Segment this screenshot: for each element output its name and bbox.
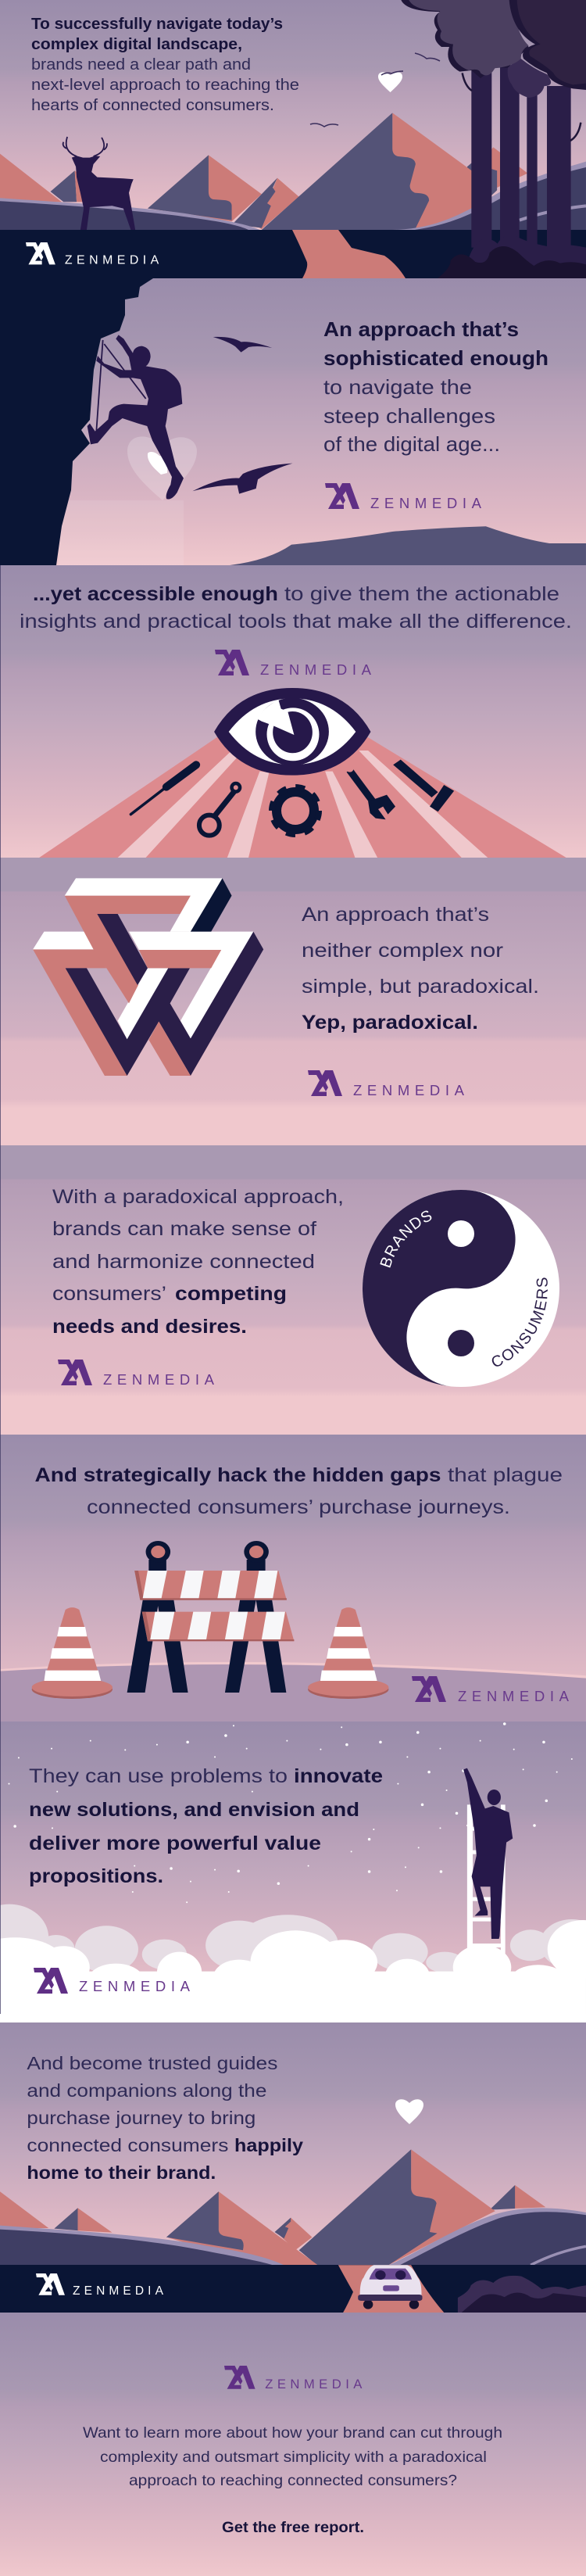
panel 1 sky background xyxy=(0,0,586,231)
panel 8 sky background xyxy=(0,2022,586,2266)
panel 8 text: connected consumers xyxy=(27,2135,228,2155)
ground band xyxy=(0,230,586,278)
panel 5 sky background xyxy=(0,1145,586,1435)
distant hill xyxy=(230,526,586,565)
ground band xyxy=(0,2265,586,2313)
panel 1 intro text: next-level approach to reaching the xyxy=(31,77,299,94)
panel 2 heading text: sophisticated enough xyxy=(323,346,548,370)
deer silhouette xyxy=(63,137,135,230)
call to action text: Want to learn more about how your brand can cut through xyxy=(83,2424,502,2442)
panel 7 text xyxy=(29,1765,383,1887)
back clouds xyxy=(0,1904,586,1973)
panel: eye and tools xyxy=(0,565,586,858)
panel left edge line xyxy=(0,565,1,2014)
logo: white Zen Media: ZENMEDIA xyxy=(73,2284,164,2298)
starfield xyxy=(9,1724,572,1902)
icon: hammer xyxy=(393,760,454,811)
panel 8 text: And become trusted guides xyxy=(27,2053,277,2073)
panel 9 sky background xyxy=(0,2313,586,2576)
yin yang symbol: CONSUMERS xyxy=(492,1277,548,1367)
birds in sky xyxy=(310,53,440,127)
panel 6 heading text: that plague xyxy=(448,1464,563,1486)
logo: Zen Media: ZENMEDIA xyxy=(79,1978,191,1994)
cliff silhouette xyxy=(0,278,153,565)
panel: climber on cliff xyxy=(0,278,586,565)
logo: Zen Media: ZENMEDIA xyxy=(260,661,372,678)
panel 1 intro text: hearts of connected consumers. xyxy=(31,97,274,114)
bottom board xyxy=(142,1612,294,1641)
panel 6 heading text: And strategically hack the hidden gaps xyxy=(34,1464,441,1486)
bushes xyxy=(458,2276,586,2313)
panel 8 text: and companions along the xyxy=(27,2080,266,2101)
call to action text xyxy=(83,2424,502,2536)
panel 8 text: purchase journey to bring xyxy=(27,2108,255,2128)
climber silhouette xyxy=(88,335,184,500)
panel 5 text: and harmonize connected xyxy=(52,1251,315,1273)
panel 7 text: new solutions, and envision and xyxy=(29,1799,359,1821)
panel 6 heading text xyxy=(34,1464,563,1518)
panel 2 heading text: An approach that’s xyxy=(323,317,519,341)
panel: yin yang xyxy=(0,1145,586,1435)
panel: clear path landscape xyxy=(0,0,586,278)
panel: call to action xyxy=(0,2313,586,2576)
panel 7 text: propositions. xyxy=(29,1865,163,1887)
logo: white Zen Media xyxy=(36,2273,164,2298)
person silhouette reaching up xyxy=(463,1768,513,1939)
panel 2 heading text: to navigate the xyxy=(323,375,472,399)
logo: Zen Media: ZENMEDIA xyxy=(370,495,482,511)
panel 3 heading text: insights and practical tools that make all the difference. xyxy=(20,611,572,632)
panel 7 text: innovate xyxy=(294,1765,383,1787)
tool icons xyxy=(130,760,454,836)
panel 1 intro text: complex digital landscape, xyxy=(31,36,242,53)
logo: Zen Media xyxy=(215,650,372,678)
panel: impossible triangle xyxy=(0,858,586,1145)
panel: road home xyxy=(0,2022,586,2313)
winding road xyxy=(292,230,406,278)
front clouds xyxy=(0,1920,586,2022)
panel 3 heading text: to give them the actionable xyxy=(284,583,559,605)
panel: roadblock xyxy=(0,1435,586,1722)
panel 8 text xyxy=(27,2053,303,2183)
traffic cone right xyxy=(308,1607,388,1699)
yin yang symbol xyxy=(363,1190,559,1387)
logo: Zen Media xyxy=(58,1360,215,1388)
barricade xyxy=(127,1541,294,1693)
logo: Zen Media xyxy=(308,1070,465,1098)
icon: gear xyxy=(272,787,319,834)
traffic cone left xyxy=(32,1607,113,1699)
panel: ladder in the clouds xyxy=(0,1722,586,2022)
icon: glowing heart xyxy=(127,436,197,500)
panel 4 text xyxy=(302,904,539,1034)
panel 1 intro text xyxy=(31,16,299,114)
yin yang symbol: BRANDS xyxy=(380,1210,431,1268)
panel 5 text: With a paradoxical approach, xyxy=(52,1186,344,1208)
panel 3 heading text xyxy=(20,583,572,632)
pale glow beneath climber xyxy=(59,500,184,565)
ladder xyxy=(467,1804,506,1954)
panel 2 heading text xyxy=(323,317,548,456)
icon: wrench xyxy=(346,765,395,819)
barricade lamps xyxy=(146,1541,269,1571)
panel 8 text: happily xyxy=(234,2135,303,2155)
logo: white Zen Media xyxy=(26,242,159,267)
panel 4 text: An approach that’s xyxy=(302,904,489,926)
panel 5 text: needs and desires. xyxy=(52,1316,247,1338)
panel 1 intro text: To successfully navigate today’s xyxy=(31,16,283,33)
icon: spanner xyxy=(199,783,240,836)
impossible triangle figure xyxy=(33,878,263,1076)
light rays xyxy=(39,737,566,858)
panel 3 heading text: ...yet accessible enough xyxy=(33,583,278,605)
logo: Zen Media: ZENMEDIA xyxy=(458,1688,570,1704)
panel 4 sky background xyxy=(0,858,586,1145)
logo: Zen Media: ZENMEDIA xyxy=(353,1082,465,1098)
panel 2 heading text: steep challenges xyxy=(323,404,495,428)
logo: Zen Media xyxy=(224,2366,363,2391)
panel 2 heading text: of the digital age... xyxy=(323,432,500,456)
panel 5 text: competing xyxy=(175,1283,287,1305)
panel 3 sky background xyxy=(0,565,586,858)
mountain range xyxy=(0,113,586,230)
call to action text: complexity and outsmart simplicity with a paradoxical xyxy=(100,2449,487,2466)
icon: white heart xyxy=(378,72,402,92)
panel 5 text: brands can make sense of xyxy=(52,1218,316,1240)
panel 6 heading text: connected consumers’ purchase journeys. xyxy=(87,1496,510,1518)
barricade legs xyxy=(127,1600,286,1693)
call to action text: Get the free report. xyxy=(222,2519,364,2536)
call to action text: approach to reaching connected consumers? xyxy=(129,2472,457,2489)
panel 1 intro text: brands need a clear path and xyxy=(31,56,251,73)
logo: Zen Media: ZENMEDIA xyxy=(103,1371,215,1388)
ground hill xyxy=(0,1662,586,1722)
panel 4 text: neither complex nor xyxy=(302,940,503,962)
panel 6 sky background xyxy=(0,1435,586,1722)
top board xyxy=(134,1571,287,1600)
panel 8 text: home to their brand. xyxy=(27,2162,216,2183)
logo: white Zen Media: ZENMEDIA xyxy=(65,254,159,267)
icon: eye xyxy=(214,688,370,776)
panel 5 text: consumers’ xyxy=(52,1283,166,1305)
panel 7 text: They can use problems to xyxy=(29,1765,288,1787)
clouds xyxy=(0,1904,586,2022)
logo: Zen Media xyxy=(412,1676,570,1704)
panel 4 text: Yep, paradoxical. xyxy=(302,1012,478,1034)
panel 7 sky background xyxy=(0,1722,586,2014)
icon: white heart xyxy=(395,2099,423,2124)
panel 4 text: simple, but paradoxical. xyxy=(302,976,539,998)
icon: screwdriver xyxy=(130,765,196,815)
birds in flight xyxy=(192,337,293,494)
forest of trees xyxy=(401,0,586,278)
road xyxy=(338,2265,444,2313)
logo: Zen Media: ZENMEDIA xyxy=(265,2377,363,2391)
logo: Zen Media xyxy=(325,483,482,511)
panel 7 text: deliver more powerful value xyxy=(29,1833,321,1854)
logo: Zen Media xyxy=(34,1968,191,1994)
car xyxy=(358,2265,422,2309)
panel 2 sky background xyxy=(0,278,586,565)
mountain range and hills xyxy=(0,2149,586,2265)
panel 5 text xyxy=(52,1186,344,1338)
